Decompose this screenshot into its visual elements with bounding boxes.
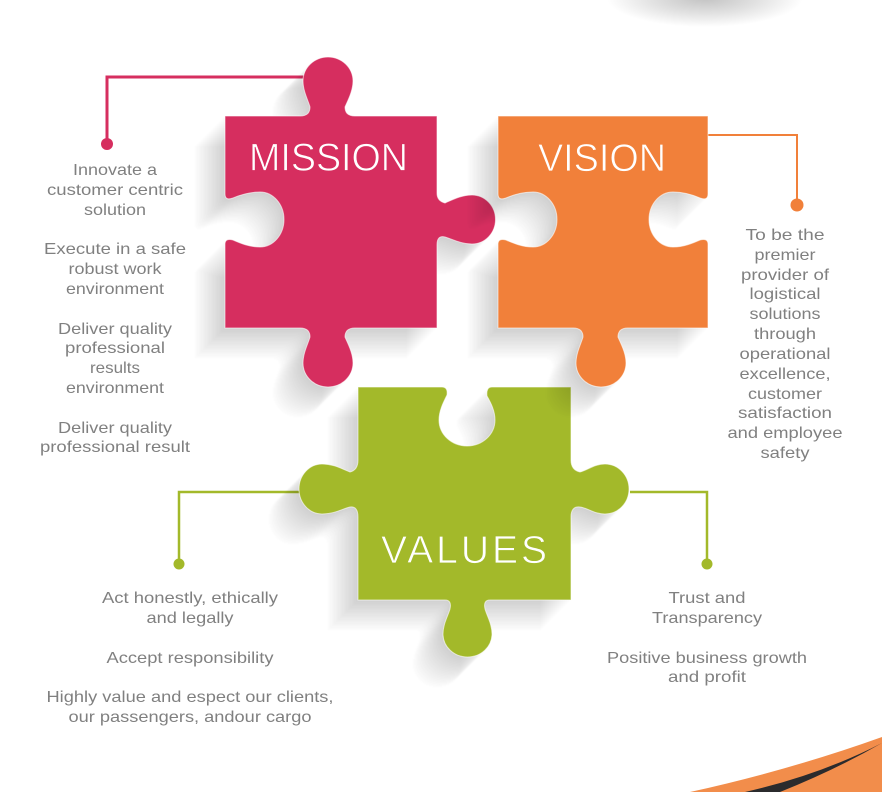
text block: values left: our passengers, andour cargo xyxy=(68,709,312,726)
values connector left xyxy=(174,492,300,570)
text block: mission points: Deliver quality xyxy=(58,321,172,338)
text block: vision statement: To be the xyxy=(746,227,825,244)
text block: values left: and legally xyxy=(146,610,234,627)
text block: values left xyxy=(46,590,334,726)
text block: mission points: robust work xyxy=(68,261,163,278)
text block: mission points: results xyxy=(90,360,140,377)
text block: mission points: Execute in a safe xyxy=(44,241,186,258)
heading: vision: VISION xyxy=(538,137,666,180)
text block: mission points xyxy=(40,162,191,456)
text block: values right: Trust and xyxy=(668,590,746,607)
text block: values right: Transparency xyxy=(652,610,762,627)
text block: mission points: Innovate a xyxy=(73,162,157,179)
text block: values right: Positive business growth xyxy=(607,650,807,667)
puzzle piece: vision xyxy=(468,116,708,417)
text block: mission points: customer centric xyxy=(47,182,183,199)
text block: vision statement xyxy=(728,227,843,462)
text block: vision statement: customer xyxy=(748,386,823,403)
text block: mission points: professional xyxy=(65,340,165,357)
text block: vision statement: safety xyxy=(760,445,810,462)
top shadow arc xyxy=(607,0,803,27)
text block: mission points: professional result xyxy=(40,439,191,456)
heading: mission: MISSION xyxy=(249,136,408,180)
text block: vision statement: premier xyxy=(754,247,816,264)
text block: values right xyxy=(607,590,807,686)
text block: values right: and profit xyxy=(668,669,747,686)
puzzle piece: values xyxy=(269,387,629,687)
mission connector xyxy=(101,77,304,150)
text block: mission points: environment xyxy=(66,380,165,397)
text block: values left: Highly value and espect our clients, xyxy=(46,689,334,706)
text block: vision statement: and employee xyxy=(728,425,843,442)
text block: vision statement: excellence, xyxy=(740,366,830,383)
text block: values left: Act honestly, ethically xyxy=(102,590,278,607)
text block: mission points: solution xyxy=(84,202,146,219)
text block: vision statement: operational xyxy=(740,346,830,363)
text block: vision statement: through xyxy=(754,326,816,343)
puzzle piece: mission xyxy=(195,57,496,417)
text block: vision statement: provider of xyxy=(741,267,830,284)
values connector right xyxy=(630,492,712,570)
bottom-right corner swoosh xyxy=(690,737,882,792)
text block: vision statement: satisfaction xyxy=(738,405,832,422)
text block: mission points: environment xyxy=(66,281,165,298)
text block: values left: Accept responsibility xyxy=(106,650,274,667)
vision connector xyxy=(708,135,804,212)
text block: mission points: Deliver quality xyxy=(58,420,172,437)
text block: vision statement: logistical xyxy=(750,286,820,303)
text block: vision statement: solutions xyxy=(750,306,820,323)
heading: values: VALUES xyxy=(381,529,547,572)
